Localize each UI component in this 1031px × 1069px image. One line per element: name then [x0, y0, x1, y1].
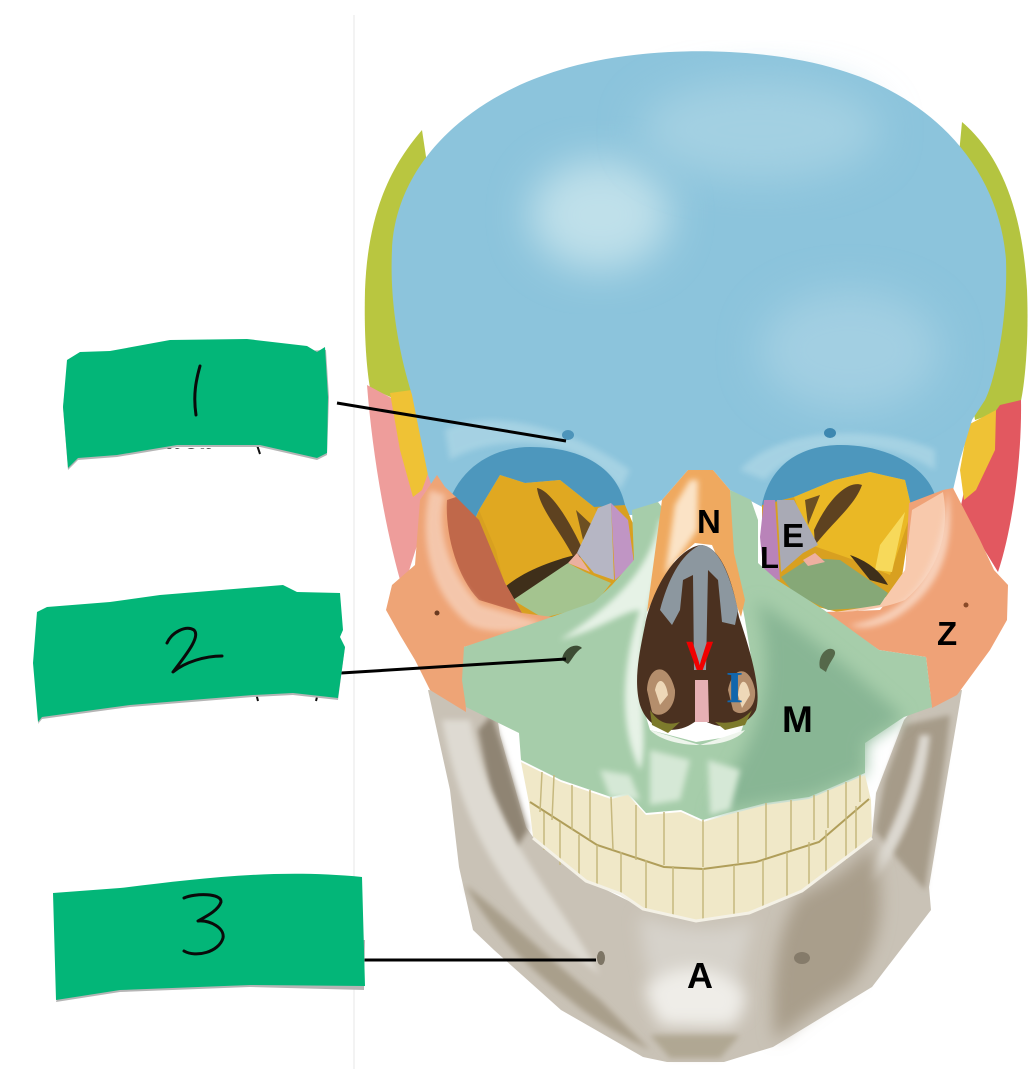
zygomatic left [386, 475, 560, 712]
temporal bone right [960, 400, 1021, 572]
label box 3 [53, 874, 365, 1002]
bone letter labels [686, 503, 957, 996]
hidden label fragment 2 [256, 692, 317, 701]
mandible [428, 690, 962, 1062]
mental foramen left [597, 951, 605, 965]
hidden label fragment 1: mon [160, 438, 215, 468]
teeth [521, 762, 872, 921]
bone letter labels: I [726, 663, 743, 712]
zygomatic foramen right [964, 602, 968, 608]
temporal bone left [367, 385, 440, 590]
skull illustration [365, 51, 1028, 1062]
infraorbital foramen right [819, 649, 835, 672]
right orbit [760, 445, 935, 615]
sphenoid wing right [960, 410, 996, 500]
label box 2 [33, 585, 345, 724]
parietal bone right [950, 122, 1028, 420]
left orbit [448, 447, 640, 625]
zygomatic right [824, 488, 1008, 708]
bone letter labels: V [686, 633, 714, 679]
bone letter labels: L [760, 540, 779, 575]
zygomatic foramen left [434, 610, 440, 616]
sphenoid wing left [390, 390, 431, 497]
parietal bone left [365, 130, 440, 410]
supraorbital notch right [824, 428, 836, 438]
leader line 2 [341, 659, 566, 673]
hidden label fragment 1b [257, 445, 260, 454]
nasal cavity [637, 545, 758, 733]
label box 1 [63, 339, 329, 470]
bone letter labels: M [782, 699, 813, 740]
leader line 3 [364, 958, 596, 962]
leader line 1 [337, 403, 566, 441]
infraorbital foramen left [562, 646, 582, 664]
maxilla [462, 490, 932, 820]
frontal bone [392, 51, 1006, 515]
supraorbital notch left [562, 430, 574, 440]
bone letter labels: A [687, 955, 713, 996]
mental foramen right [794, 952, 810, 964]
nasal bones [647, 470, 745, 617]
bone letter labels: Z [937, 615, 957, 652]
bone letter labels: N [697, 503, 721, 540]
bone letter labels: E [782, 517, 804, 554]
